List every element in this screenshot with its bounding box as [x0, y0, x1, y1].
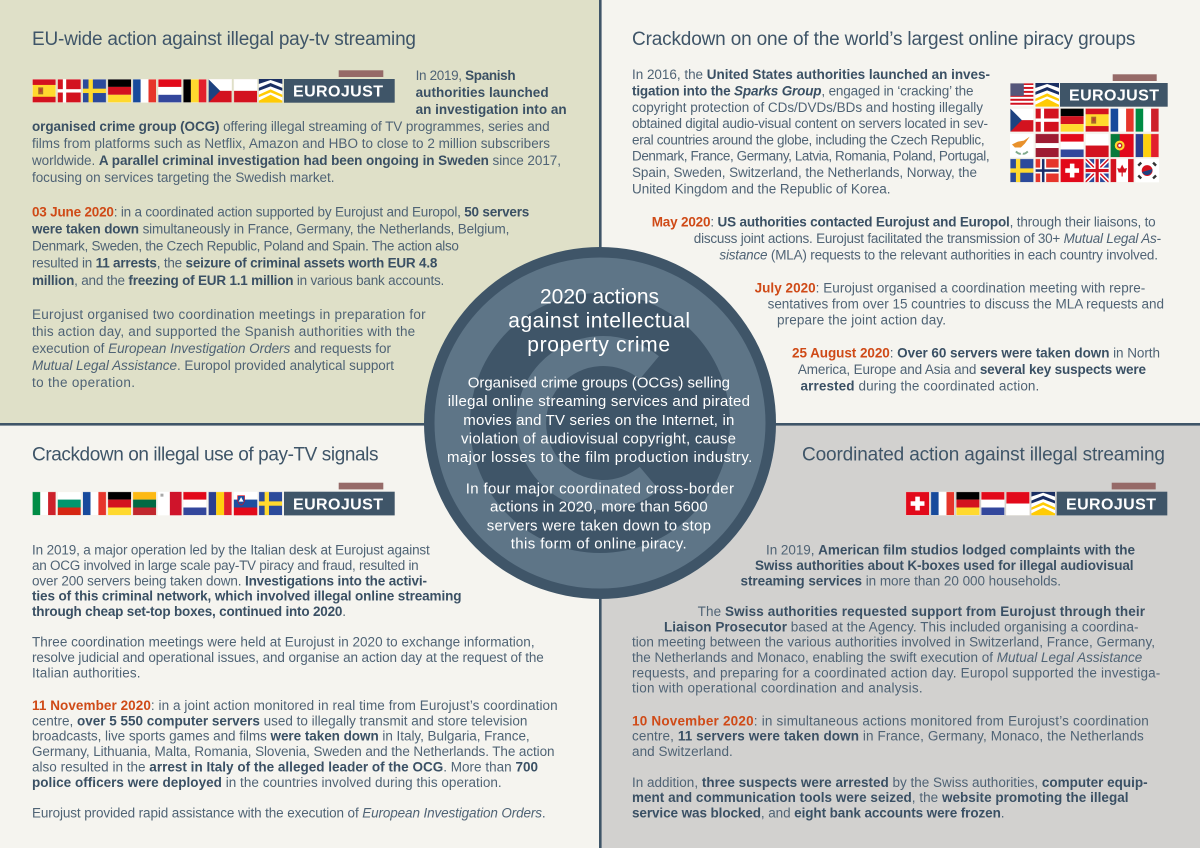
text block: Sparks Group	[632, 67, 990, 196]
text block: K-boxes complaints	[740, 543, 1135, 588]
heading: coordinated action: Coordinated action against illegal streaming	[802, 445, 1165, 466]
circle title: 2020 actions	[540, 285, 659, 308]
text block: coordination meetings: Eurojust organised two coordination meetings in preparation for	[32, 307, 426, 322]
flags and Eurojust logo: coordinated action	[906, 483, 1167, 515]
flags and Eurojust logo: pay-TV signals	[32, 483, 395, 515]
text block: three coordination meetings: Italian authorities.	[32, 665, 140, 680]
text block: Spanish investigation: authorities launched	[416, 85, 549, 100]
text block: July 2020: prepare the joint action day.	[777, 313, 946, 328]
text block: 25 August 2020: America, Europe and Asia and several key suspects were	[798, 362, 1146, 377]
text block: K-boxes complaints: In 2019, American film studios lodged complaints with the	[766, 543, 1135, 558]
panel: EU-wide action against illegal pay-tv streaming	[0, 0, 600, 424]
circle text: organised crime groups: movies and TV series on the Internet, in	[463, 412, 734, 429]
flags and Eurojust logo: coordinated action: EUROJUST	[1066, 496, 1156, 513]
circle text: organised crime groups	[447, 375, 752, 466]
text block: 03 June 2020: 03 June 2020: in a coordinated action supported by Eurojust and Europol, 50 servers	[32, 204, 529, 220]
central circle: 2020 actions against intellectual property crime	[424, 247, 776, 599]
circle text: four major actions: this form of online piracy.	[511, 536, 687, 553]
text block: July 2020	[755, 280, 1164, 328]
circle text: four major actions: actions in 2020, more than 5600	[490, 499, 708, 516]
text block: K-boxes complaints: Swiss authorities about K-boxes used for illegal audiovisual	[755, 558, 1134, 573]
text block: 11 November 2020: broadcasts, live sports games and films were taken down in Italy, Bulgaria, France,	[32, 729, 530, 744]
text block: Italian desk operation: ties of this criminal network, which involved illegal online streaming	[32, 589, 462, 604]
text block: 03 June 2020: were taken down simultaneously in France, Germany, the Netherlands, Belgium,	[31, 222, 509, 236]
text block: Sparks Group: Spain, Sweden, Switzerland, the Netherlands, Norway, the	[632, 165, 977, 180]
text block: 25 August 2020: arrested during the coordinated action.	[800, 378, 1039, 393]
text block: Sparks Group: eral countries around the globe, including the Czech Republic,	[632, 132, 985, 148]
flags and Eurojust logo: Sparks Group	[1010, 74, 1168, 182]
text block: May 2020: discuss joint actions. Eurojust facilitated the transmission of 30+ Mutual Legal As-	[694, 231, 1162, 246]
text block: Spanish investigation: organised crime group (OCG) offering illegal streaming of TV programmes, series and	[32, 119, 550, 134]
circle text: four major actions: servers were taken down to stop	[487, 517, 711, 534]
circle text: four major actions	[466, 480, 734, 553]
text block: Spanish investigation	[31, 68, 567, 185]
text block: May 2020	[652, 214, 1162, 262]
circle text: organised crime groups: major losses to the film production industry.	[447, 449, 752, 466]
text block: 11 November 2020	[32, 698, 558, 790]
text block: 11 November 2020: 11 November 2020: in a joint action monitored in real time from Eurojust’s coordination	[32, 698, 558, 713]
text block: suspects arrested: ment and communication tools were seized, the website promoting the illegal	[632, 790, 1128, 805]
panel: Crackdown on one of the world's largest online piracy groups	[600, 0, 1200, 424]
text block: Swiss authorities request: Liaison Prosecutor based at the Agency. This included organising a coordina-	[664, 619, 1138, 634]
text block: July 2020: sentatives from over 15 countries to discuss the MLA requests and	[768, 296, 1164, 311]
text block: Italian desk operation: an OCG involved in large scale pay-TV piracy and fraud, resulted in	[32, 558, 419, 573]
text block: Spanish investigation: focusing on services targeting the Swedish market.	[32, 170, 334, 185]
text block: 25 August 2020	[792, 346, 1160, 393]
text block: 25 August 2020: 25 August 2020: Over 60 servers were taken down in North	[792, 346, 1160, 361]
heading: pay-TV signals: Crackdown on illegal use of pay-TV signals	[32, 445, 378, 466]
flags and Eurojust logo: EU-wide action	[32, 70, 395, 103]
heading: Crackdown on piracy groups: Crackdown on one of the world’s largest online piracy groups	[632, 29, 1135, 50]
text block: Italian desk operation: In 2019, a major operation led by the Italian desk at Eurojust against	[32, 543, 430, 558]
text block: coordination meetings: this action day, and supported the Spanish authorities with the	[32, 324, 415, 339]
text block: Sparks Group: obtained digital audio-visual content on servers located in sev-	[632, 116, 988, 131]
text block: three coordination meetings: resolve judicial and operational issues, and organise an action day at the request of the	[32, 650, 544, 665]
text block: Spanish investigation: an investigation into an	[416, 102, 567, 117]
text block: three coordination meetings	[32, 635, 544, 680]
flags and Eurojust logo: pay-TV signals: EUROJUST	[293, 496, 383, 513]
text block: 11 November 2020: police officers were deployed in the countries involved during this operation.	[32, 775, 502, 790]
circle text: organised crime groups: violation of audiovisual copyright, cause	[461, 430, 736, 447]
text block: K-boxes complaints: streaming services in more than 20 000 households.	[740, 573, 1061, 588]
text block: 10 November 2020: centre, 11 servers were taken down in France, Germany, Monaco, the Netherlands	[632, 729, 1144, 744]
text block: coordination meetings: execution of European Investigation Orders and requests for	[32, 341, 392, 356]
text block: Italian desk operation	[32, 543, 462, 619]
text block: 11 November 2020: centre, over 5 550 computer servers used to illegally transmit and store television	[32, 713, 527, 728]
circle title	[508, 285, 690, 357]
text block: Swiss authorities request: The Swiss authorities requested support from Eurojust through their	[698, 604, 1146, 619]
text block: Swiss authorities request: the Netherlands and Monaco, enabling the swift execution of Mutual Legal Assistance	[632, 650, 1142, 665]
text block: Italian desk operation: over 200 servers being taken down. Investigations into the activi-	[32, 573, 427, 588]
text block: suspects arrested: In addition, three suspects were arrested by the Swiss authorities, computer equip-	[632, 775, 1148, 790]
heading: EU-wide action: EU-wide action against illegal pay-tv streaming	[32, 29, 416, 50]
text block: Swiss authorities request	[632, 604, 1160, 696]
circle text: organised crime groups: Organised crime groups (OCGs) selling	[468, 375, 730, 392]
flags and Eurojust logo: EU-wide action: EUROJUST	[293, 84, 383, 101]
text block: May 2020: sistance (MLA) requests to the relevant authorities in each country involved.	[719, 247, 1158, 262]
text block: Spanish investigation: worldwide. A parallel criminal investigation had been ongoing in Sweden since 2017,	[31, 153, 561, 168]
text block: coordination meetings: Mutual Legal Assistance. Europol provided analytical support	[32, 358, 394, 373]
flags and Eurojust logo: Sparks Group: EUROJUST	[1069, 88, 1159, 105]
circle title: against intellectual	[508, 309, 690, 332]
circle text: four major actions: In four major coordinated cross-border	[466, 480, 734, 497]
text block: three coordination meetings: Three coordination meetings were held at Eurojust in 2020 to exchange information,	[32, 635, 535, 650]
text block: Swiss authorities request: tion with operational coordination and analysis.	[632, 681, 923, 696]
circle text: organised crime groups: illegal online streaming services and pirated	[448, 393, 750, 410]
text block: Sparks Group: copyright protection of CDs/DVDs/BDs and hosting illegally	[632, 100, 983, 115]
text block: Sparks Group: United Kingdom and the Republic of Korea.	[632, 182, 890, 196]
panel: Coordinated action against illegal streaming	[600, 424, 1200, 848]
text block: 03 June 2020	[31, 204, 529, 288]
text block: Swiss authorities request: requests, and preparing for a coordinated action day. Europol supported the investiga-	[632, 665, 1160, 680]
text block: 10 November 2020: and Switzerland.	[632, 744, 733, 759]
text block: Spanish investigation: films from platforms such as Netflix, Amazon and HBO to close to 2 million subscribers	[32, 136, 550, 151]
panel: Crackdown on illegal use of pay-TV signals	[0, 424, 600, 848]
text block: suspects arrested	[632, 775, 1148, 821]
text block: rapid assistance: Eurojust provided rapid assistance with the execution of European Investigation Orders.	[32, 806, 546, 821]
text block: 10 November 2020	[632, 713, 1149, 759]
text block: Sparks Group: tigation into the Sparks Group, engaged in ‘cracking’ the	[632, 84, 974, 98]
text block: Sparks Group: Denmark, France, Germany, Latvia, Romania, Poland, Portugal,	[632, 149, 990, 164]
text block: Sparks Group: In 2016, the United States authorities launched an inves-	[632, 67, 990, 82]
text block: July 2020: July 2020: Eurojust organised a coordination meeting with repre-	[755, 280, 1145, 295]
text block: 03 June 2020: resulted in 11 arrests, the seizure of criminal assets worth EUR 4.8	[32, 256, 438, 270]
copyright emblem	[424, 247, 776, 599]
text block: suspects arrested: service was blocked, and eight bank accounts were frozen.	[632, 806, 1004, 821]
text block: coordination meetings: to the operation.	[32, 375, 135, 390]
text block: 11 November 2020: also resulted in the arrest in Italy of the alleged leader of the OCG. More than 700	[32, 759, 538, 774]
text block: 11 November 2020: Germany, Lithuania, Malta, Romania, Slovenia, Sweden and the Netherlands. The action	[32, 744, 554, 759]
text block: coordination meetings	[32, 307, 426, 390]
text block: Spanish investigation: In 2019, Spanish	[416, 68, 516, 83]
circle title: property crime	[527, 334, 670, 357]
text block: 03 June 2020: Denmark, Sweden, the Czech Republic, Poland and Spain. The action also	[32, 238, 459, 254]
text block: May 2020: May 2020: US authorities contacted Eurojust and Europol, through their liaisons, to	[652, 214, 1156, 230]
text block: Swiss authorities request: tion meeting between the various authorities involved in Switzerland, France, Germany,	[632, 635, 1155, 650]
text block: 03 June 2020: million, and the freezing of EUR 1.1 million in various bank accounts.	[32, 273, 444, 288]
text block: Italian desk operation: through cheap set-top boxes, continued into 2020.	[32, 604, 346, 619]
text block: 10 November 2020: 10 November 2020: in simultaneous actions monitored from Eurojust’s coordination	[632, 713, 1149, 728]
